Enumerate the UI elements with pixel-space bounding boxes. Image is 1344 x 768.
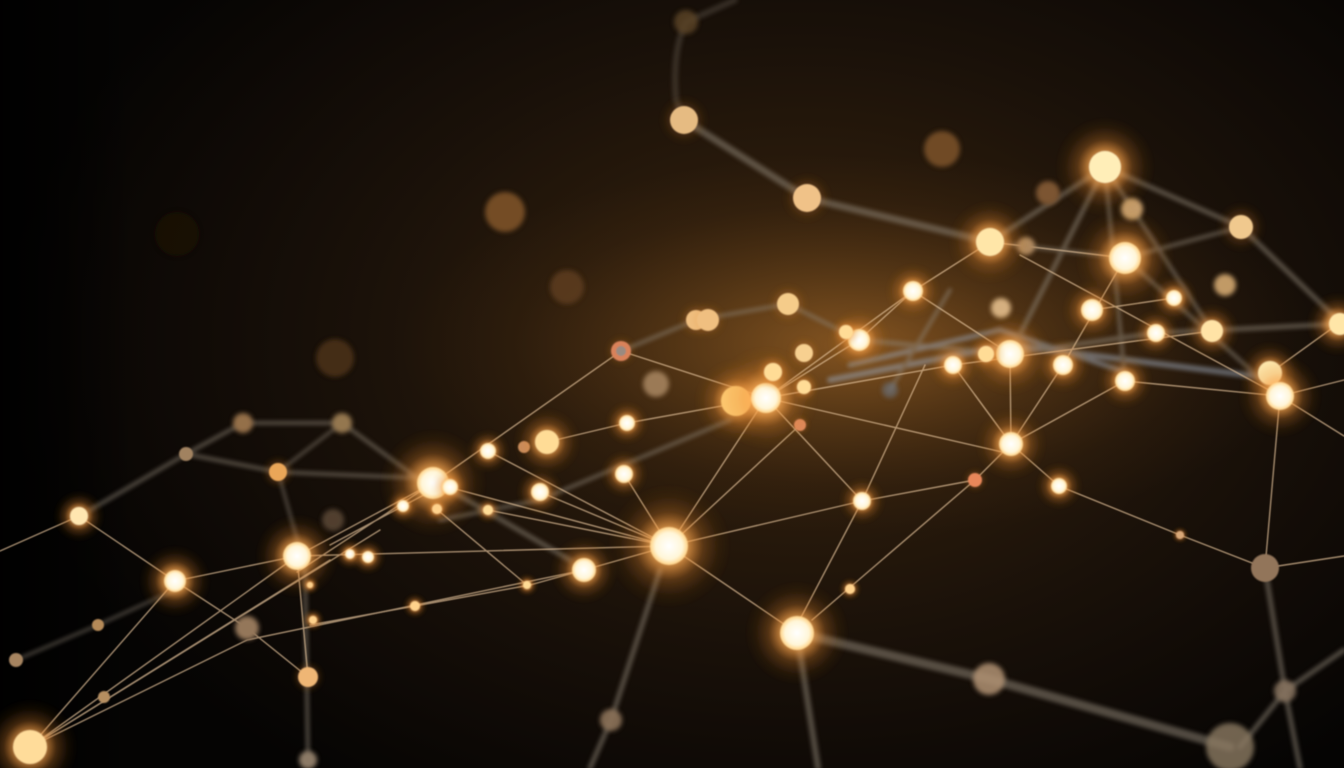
dim medium nodes [9,94,1279,703]
sharp thin links [0,242,1344,747]
central warm glow [400,155,1320,535]
